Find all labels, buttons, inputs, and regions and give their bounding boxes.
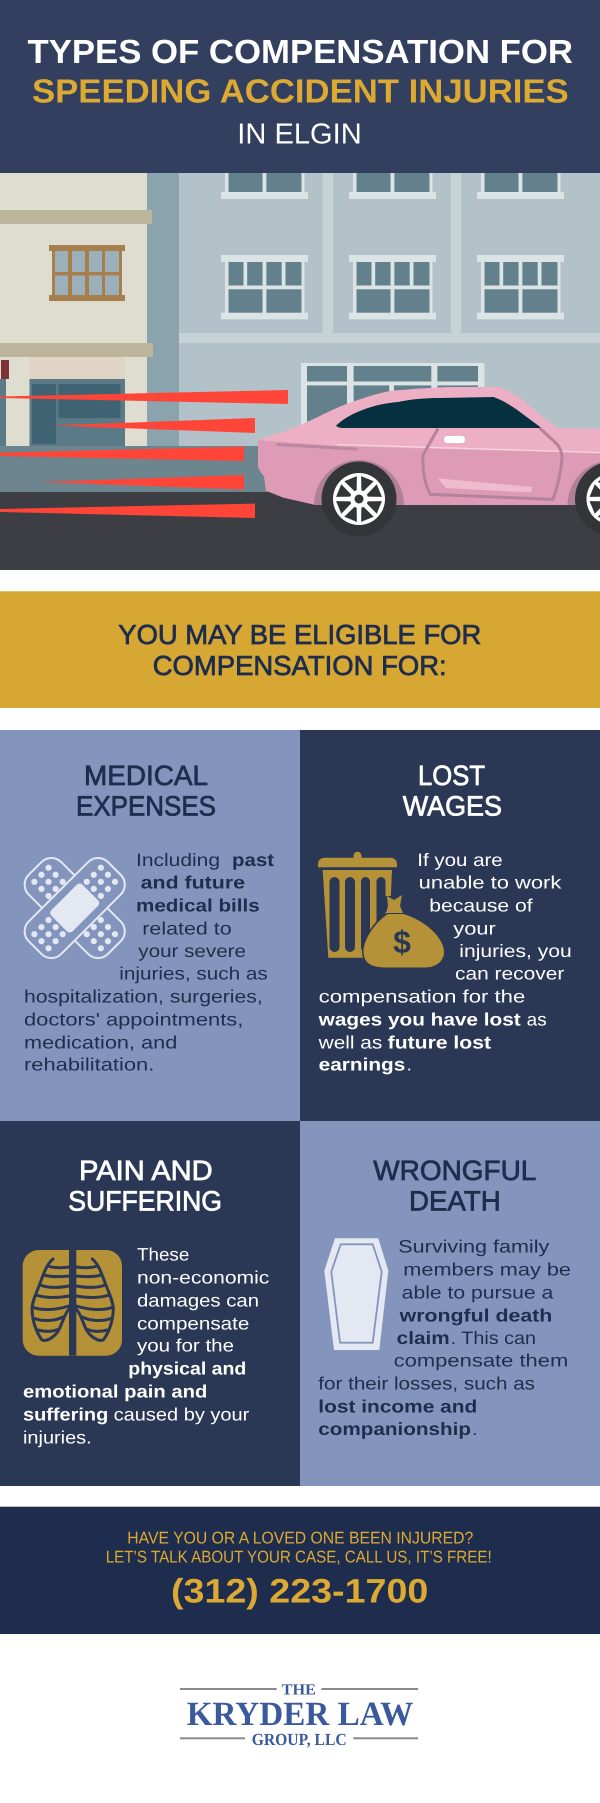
heading: medical expenses: EXPENSES [76, 791, 216, 822]
icon: rib cage [23, 1250, 122, 1356]
pain and suffering text: These [137, 1245, 189, 1265]
heading: wrongful death [373, 1155, 536, 1217]
lost wages text: because of [429, 896, 534, 916]
subtitle: IN ELGIN [237, 118, 362, 150]
medical expenses text: medication, and [24, 1033, 177, 1053]
heading: pain and suffering [68, 1155, 222, 1217]
medical expenses text: related to [142, 918, 232, 938]
illustration: speeding car on street [0, 173, 600, 570]
wrongful death text: . This can [451, 1328, 536, 1348]
medical expenses text: your severe [138, 941, 246, 961]
lost wages text: . [407, 1055, 412, 1075]
heading: medical expenses: MEDICAL [84, 760, 208, 791]
logo: the kryder law group [180, 1681, 418, 1749]
heading: wrongful death: WRONGFUL [373, 1155, 536, 1186]
side wall [147, 173, 179, 446]
pain and suffering text: caused by your [114, 1405, 249, 1425]
lost wages text: wages you have lost [318, 1009, 521, 1029]
eligibility banner: YOU MAY BE ELIGIBLE FOR [118, 619, 481, 650]
wrongful death text: for their losses, such as [318, 1373, 535, 1393]
medical expenses text: medical bills [136, 896, 260, 916]
lost wages text: can recover [455, 964, 564, 984]
panel: medical expenses [0, 730, 300, 1121]
medical expenses text: and future [141, 873, 245, 893]
icon: coffin [324, 1238, 388, 1350]
pain and suffering text: emotional pain and [23, 1382, 207, 1402]
medical expenses text: rehabilitation. [24, 1055, 154, 1075]
logo: the kryder law group: KRYDER LAW [187, 1696, 413, 1733]
heading: lost wages: WAGES [403, 791, 502, 822]
heading: pain and suffering: SUFFERING [68, 1186, 222, 1217]
wrongful death text: companionship [318, 1419, 471, 1439]
title line 2: SPEEDING ACCIDENT INJURIES [32, 74, 569, 111]
medical expenses text: Including [136, 850, 220, 870]
pain and suffering text: non-economic [137, 1268, 269, 1288]
lost wages text: injuries, you [459, 941, 572, 961]
pain and suffering text: physical and [128, 1359, 246, 1379]
pain and suffering text: suffering [23, 1405, 108, 1425]
pain and suffering text: compensate [137, 1313, 249, 1333]
title header [0, 0, 600, 173]
lost wages text: as [527, 1009, 547, 1029]
pain and suffering text [23, 1245, 269, 1447]
lost wages text: If you are [417, 850, 503, 870]
icon: bandages [19, 852, 131, 964]
lost wages text: earnings [319, 1055, 405, 1075]
medical expenses text: hospitalization, surgeries, [24, 987, 263, 1007]
lost wages text: compensation for the [319, 987, 525, 1007]
medical expenses text [24, 850, 274, 1075]
wrongful death text: wrongful death [399, 1305, 552, 1325]
medical expenses text: injuries, such as [119, 964, 268, 984]
rear wheel [568, 462, 600, 536]
pain and suffering text: injuries. [23, 1427, 92, 1447]
eligibility banner: COMPENSATION FOR: [153, 650, 447, 681]
call to action text: HAVE YOU OR A LOVED ONE BEEN INJURED? [127, 1528, 473, 1547]
panel: pain and suffering [0, 1121, 300, 1486]
title line 1: TYPES OF COMPENSATION FOR [28, 34, 573, 71]
wrongful death text: members may be [403, 1260, 571, 1280]
sidewalk [0, 446, 600, 492]
wrongful death text: Surviving family [398, 1237, 549, 1257]
panel: lost wages [300, 730, 600, 1121]
eligibility banner [0, 591, 600, 708]
wrongful death text: compensate them [394, 1351, 568, 1371]
lost wages text: unable to work [419, 873, 563, 893]
call to action [0, 1507, 600, 1634]
logo: the kryder law group: GROUP, LLC [252, 1730, 347, 1749]
icon: trash can and money bag: $ [393, 924, 411, 960]
icon: trash can and money bag [318, 852, 444, 968]
phone number: (312) 223-1700 [171, 1573, 428, 1611]
lost wages text: well as [318, 1033, 382, 1053]
car [258, 387, 600, 536]
pain and suffering text: you for the [137, 1336, 234, 1356]
call to action text [106, 1528, 492, 1566]
wrongful death text: claim [397, 1328, 450, 1348]
lost wages text: future lost [388, 1033, 491, 1053]
medical expenses text: doctors' appointments, [24, 1009, 243, 1029]
pain and suffering text: damages can [137, 1291, 259, 1311]
left building [0, 173, 153, 446]
wrongful death text: lost income and [318, 1396, 477, 1416]
speed streaks [0, 390, 288, 518]
wrongful death text: . [472, 1419, 477, 1439]
wrongful death text [318, 1237, 571, 1439]
medical expenses text: past [232, 850, 274, 870]
panel: wrongful death [300, 1121, 600, 1486]
right building [179, 173, 600, 446]
call to action text: LET’S TALK ABOUT YOUR CASE, CALL US, IT’S FREE! [106, 1547, 492, 1566]
lost wages text [318, 850, 572, 1075]
road [0, 492, 600, 570]
heading: medical expenses [76, 760, 216, 822]
wrongful death text: able to pursue a [402, 1283, 554, 1303]
heading: wrongful death: DEATH [409, 1186, 501, 1217]
logo: the kryder law group: THE [282, 1681, 316, 1698]
front wheel [314, 460, 404, 536]
lost wages text: your [453, 918, 496, 938]
heading: pain and suffering: PAIN AND [79, 1155, 213, 1186]
heading: lost wages [403, 760, 502, 822]
heading: lost wages: LOST [418, 760, 485, 791]
